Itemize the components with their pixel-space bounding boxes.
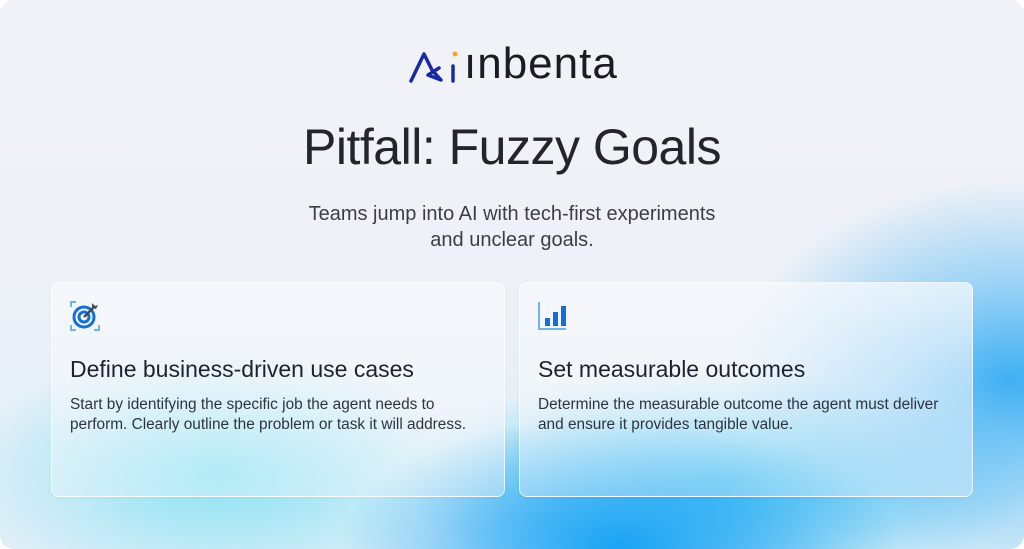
- panel: measurable outcomes: [519, 282, 973, 497]
- heading: Set measurable outcomes: [538, 356, 805, 382]
- subtitle: [309, 203, 715, 251]
- logo: ınbenta: [464, 39, 618, 88]
- text: perform. Clearly outline the problem or task it will address.: [70, 416, 466, 433]
- subtitle: and unclear goals.: [430, 229, 594, 251]
- text: [538, 396, 938, 433]
- text: Start by identifying the specific job the agent needs to: [70, 396, 434, 413]
- title: Pitfall: Fuzzy Goals: [303, 119, 721, 175]
- heading: Define business-driven use cases: [70, 356, 414, 382]
- text: and ensure it provides tangible value.: [538, 416, 793, 433]
- panel: business-driven use cases: [51, 282, 505, 497]
- icon: bar chart: [538, 302, 566, 330]
- icon: target: [70, 301, 100, 331]
- subtitle: Teams jump into AI with tech-first experiments: [309, 203, 715, 225]
- text: [70, 396, 466, 433]
- text: Determine the measurable outcome the agent must deliver: [538, 396, 938, 413]
